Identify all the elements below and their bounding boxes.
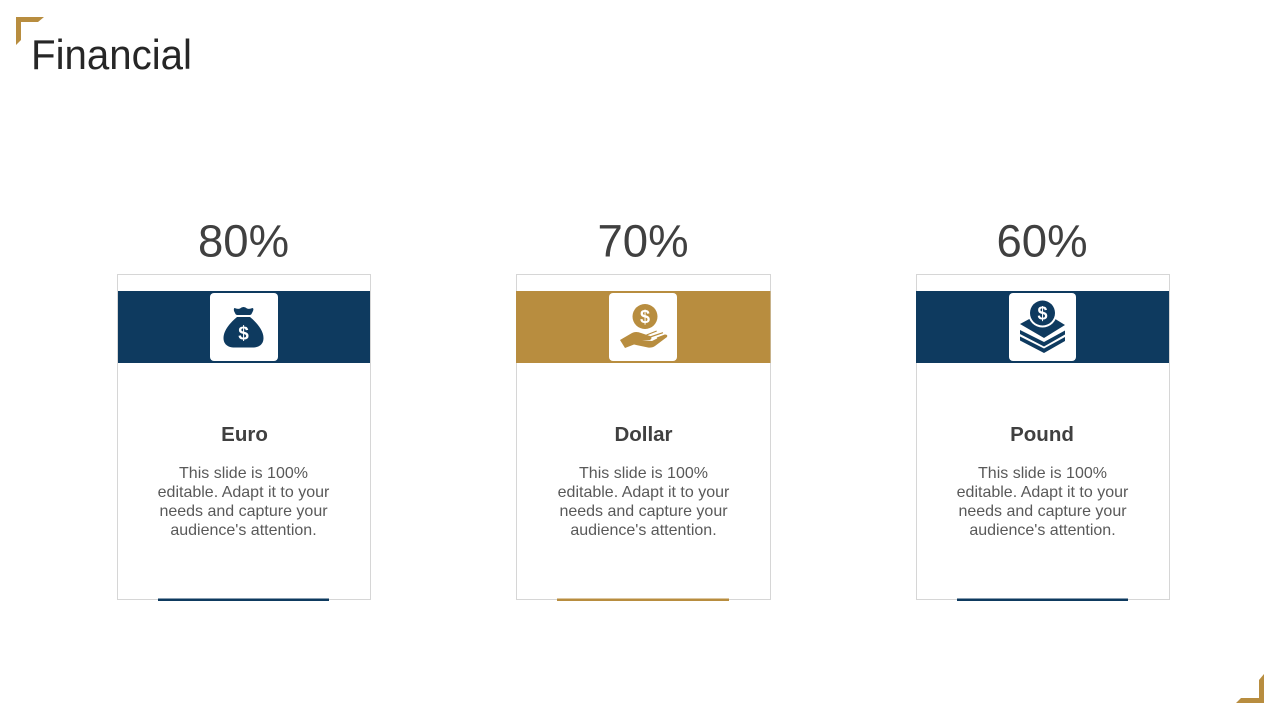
text block: Pound: This slide is 100% bbox=[978, 465, 1107, 482]
percentage: Pound: 60% bbox=[996, 216, 1088, 266]
heading: Dollar: Dollar bbox=[614, 423, 673, 446]
text block: Dollar: audience's attention. bbox=[570, 522, 717, 539]
card frame: Dollar bbox=[516, 274, 770, 600]
icon: stack of money with coin: $ bbox=[1037, 304, 1048, 324]
percentage: Euro: 80% bbox=[198, 216, 289, 266]
text block: Euro: This slide is 100% bbox=[179, 465, 308, 482]
colour band: Dollar bbox=[516, 291, 770, 363]
heading: Pound: Pound bbox=[1010, 423, 1074, 446]
bottom accent: Dollar bbox=[557, 598, 729, 601]
percentage: Dollar: 70% bbox=[597, 216, 689, 266]
heading: Euro: Euro bbox=[221, 423, 268, 446]
text block: Dollar: This slide is 100% bbox=[579, 465, 708, 482]
colour band: Euro bbox=[118, 291, 370, 363]
corner bracket: bottom right bbox=[1236, 674, 1264, 703]
card frame: Euro bbox=[118, 274, 370, 600]
icon: hand with coin: $ bbox=[640, 307, 650, 327]
colour band: Pound bbox=[916, 291, 1169, 363]
card frame: Pound bbox=[916, 274, 1170, 600]
panel: Dollar bbox=[516, 216, 770, 601]
text block: Euro: needs and capture your bbox=[159, 503, 328, 520]
icon: money bag bbox=[210, 293, 278, 361]
bottom accent: Euro bbox=[158, 598, 329, 601]
text block: Pound: needs and capture your bbox=[958, 503, 1127, 520]
title: Financial bbox=[31, 31, 192, 78]
text block: Dollar: needs and capture your bbox=[559, 503, 728, 520]
text block: Pound: editable. Adapt it to your bbox=[957, 484, 1129, 501]
icon: stack of money with coin bbox=[1009, 293, 1076, 361]
panel: Pound bbox=[916, 216, 1170, 601]
icon: hand with coin bbox=[609, 293, 677, 361]
text block: Pound: audience's attention. bbox=[969, 522, 1116, 539]
corner bracket: top left bbox=[16, 17, 44, 45]
icon: money bag: $ bbox=[238, 324, 249, 344]
text block: Euro: audience's attention. bbox=[170, 522, 317, 539]
bottom accent: Pound bbox=[957, 598, 1128, 601]
text block: Euro: editable. Adapt it to your bbox=[158, 484, 330, 501]
panel: Euro bbox=[118, 216, 370, 601]
text block: Dollar: editable. Adapt it to your bbox=[558, 484, 730, 501]
